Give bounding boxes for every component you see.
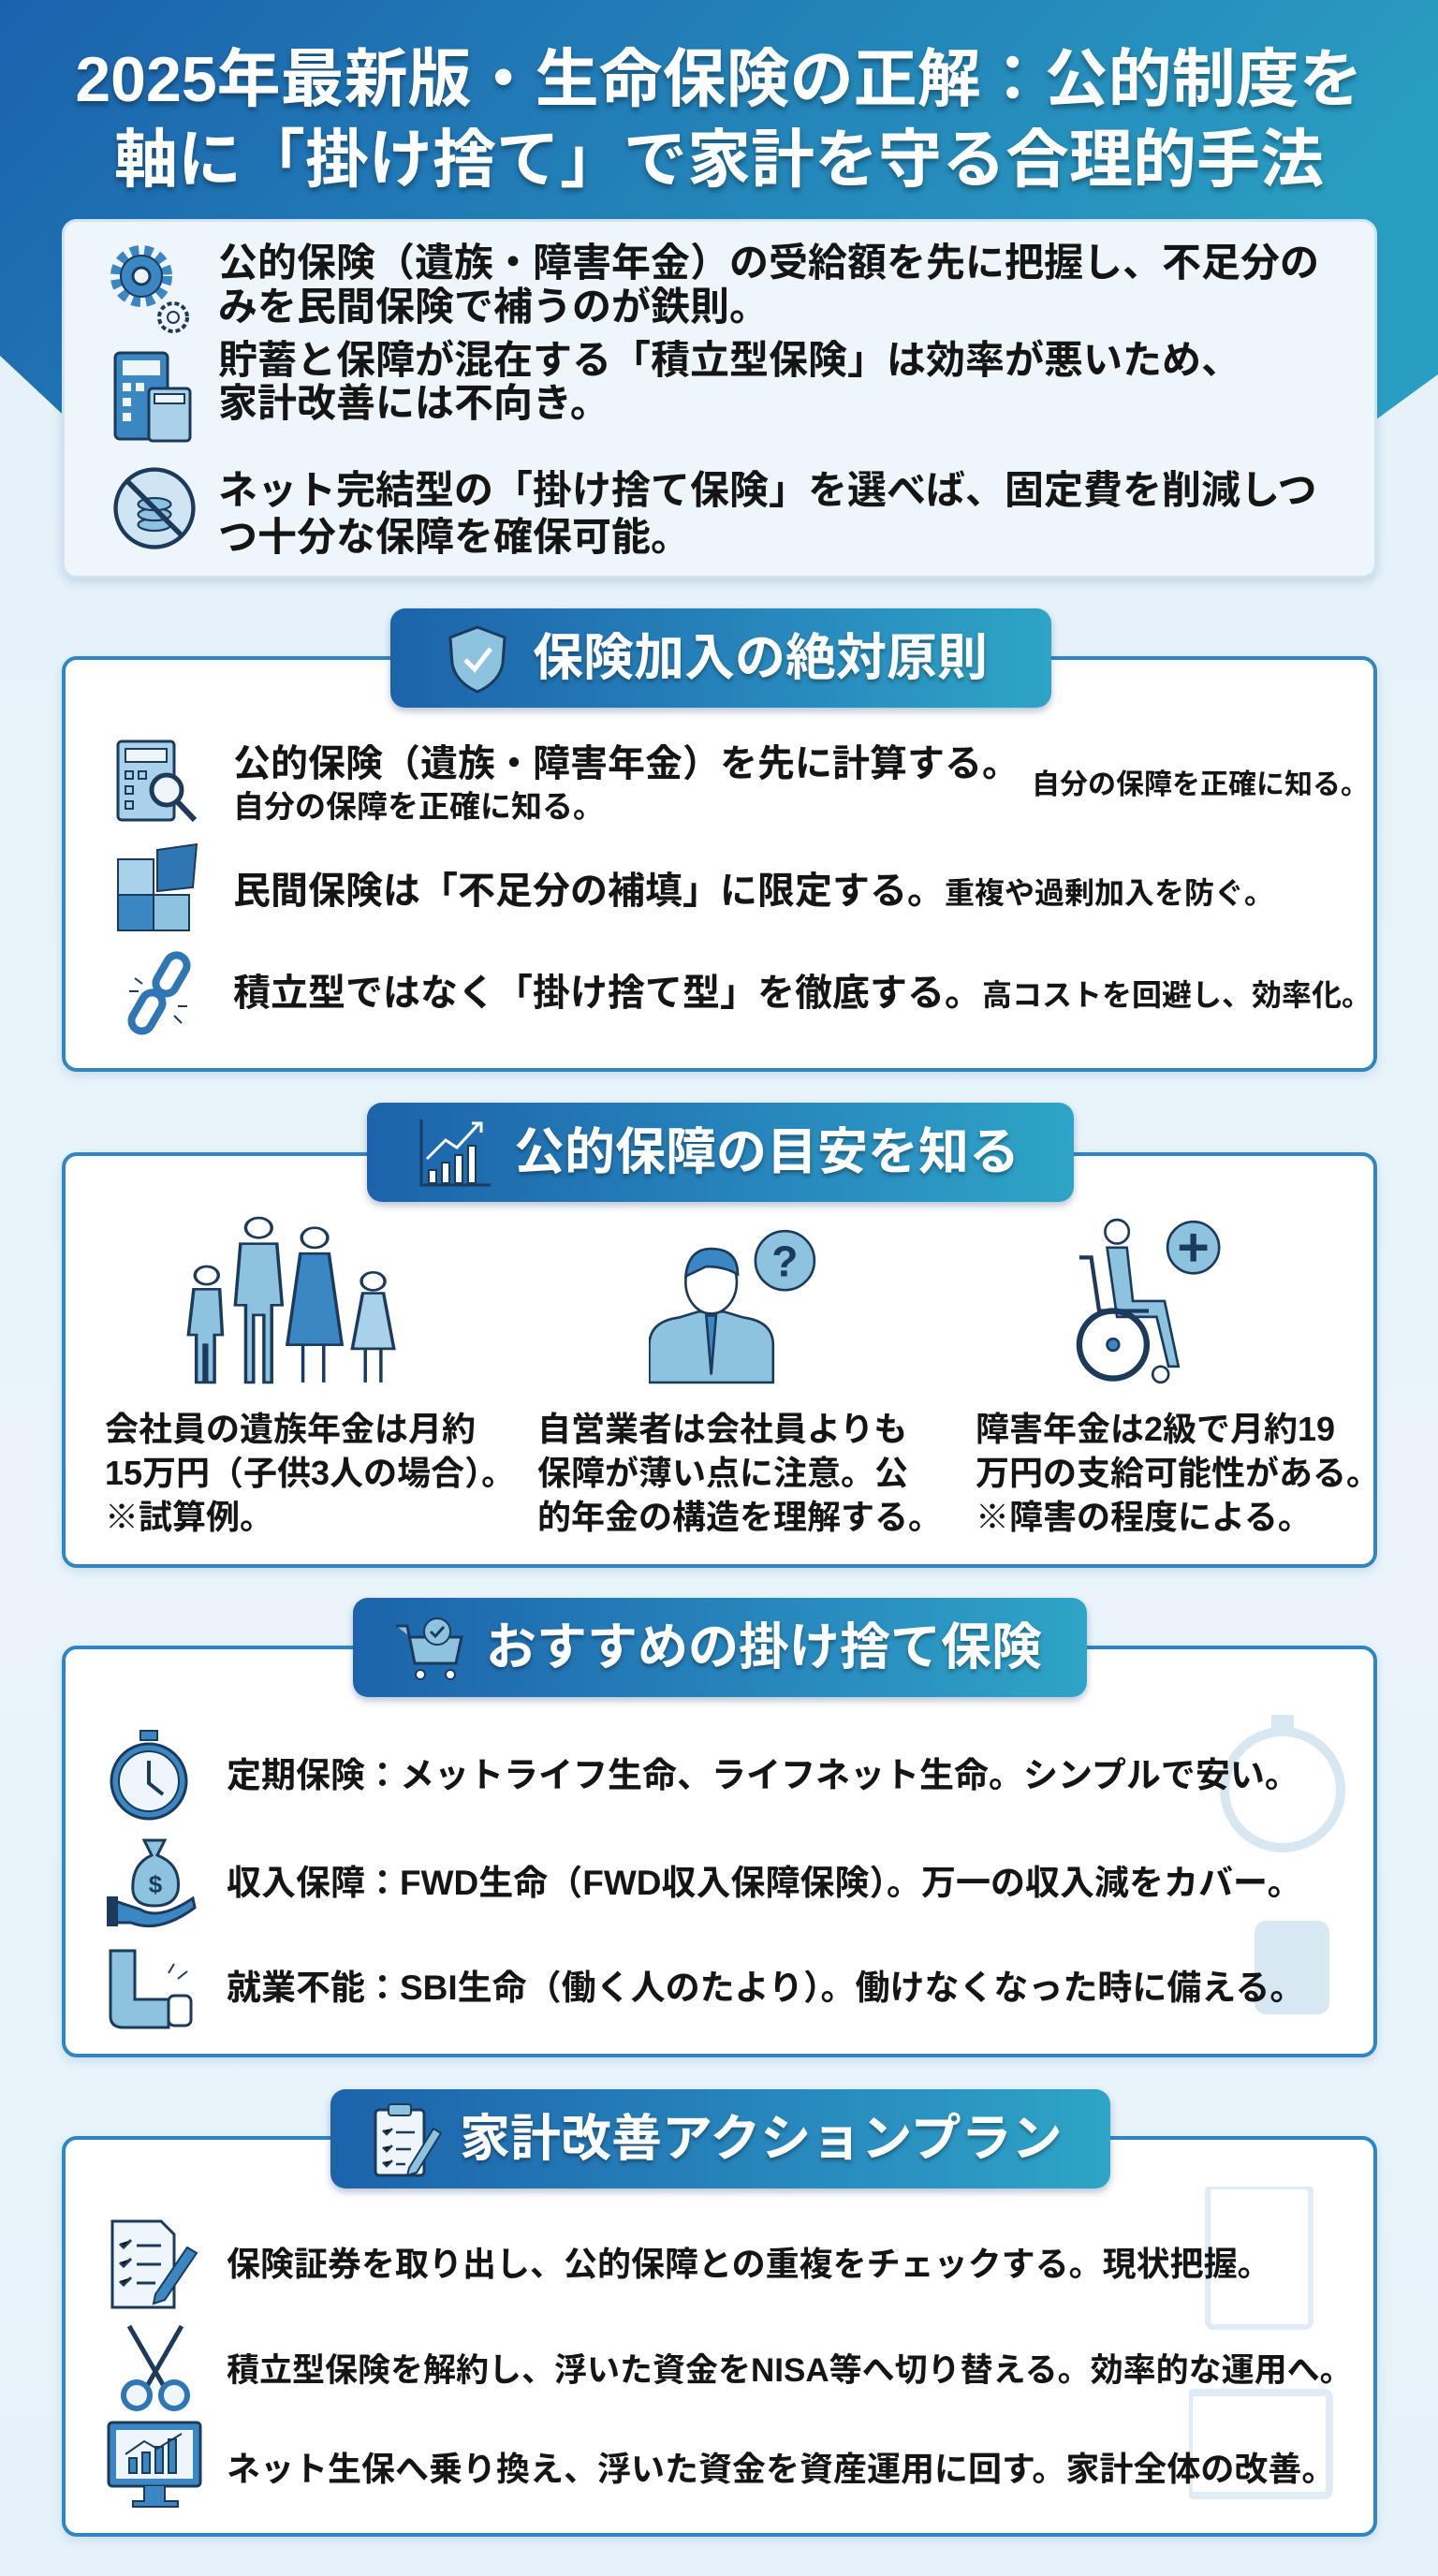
- title: 2025年最新版・生命保険の正解：公的制度を: [75, 44, 1363, 115]
- icon: no coins: [113, 467, 196, 549]
- header: principles: 保険加入の絶対原則: [533, 630, 988, 686]
- item: public calc: [116, 739, 1369, 824]
- icon: checklist: [110, 2220, 198, 2308]
- text: item 3: ネット完結型の「掛け捨て保険」を選べば、固定費を削減しつ: [218, 468, 1316, 512]
- item: public calc: 自分の保障を正確に知る。: [233, 789, 604, 824]
- icon: calculator: [114, 352, 191, 442]
- text: 定期保険：メットライフ生命、ライフネット生命。シンプルで安い。: [227, 1756, 1299, 1794]
- icon: money bag hand: $: [149, 1870, 163, 1898]
- text: 自営業者は会社員よりも: [537, 1410, 907, 1448]
- text: item 2: 貯蓄と保障が混在する「積立型保険」は効率が悪いため、: [218, 338, 1240, 382]
- icon: monitor chart: [107, 2421, 204, 2510]
- icon: chart: [419, 1120, 491, 1187]
- column: self-employed: [537, 1230, 942, 1536]
- item: term life: [110, 1730, 1299, 1820]
- icon: money bag hand: [107, 1838, 197, 1928]
- icon: person question: ?: [771, 1237, 799, 1285]
- text: 収入保障：FWD生命（FWD収入保障保険）。万一の収入減をカバー。: [227, 1864, 1302, 1902]
- item: income: [107, 1838, 1302, 1928]
- text: ※試算例。: [105, 1498, 273, 1536]
- icon: stopwatch: [110, 1730, 187, 1820]
- column: family: [105, 1217, 515, 1536]
- text: item 2: [218, 338, 1240, 425]
- item: switch online: [103, 2421, 1357, 2514]
- text: item 3: つ十分な保障を確保可能。: [218, 515, 690, 559]
- text: item 1: 公的保険（遺族・障害年金）の受給額を先に把握し、不足分の: [218, 241, 1319, 285]
- icon: cart: [396, 1617, 463, 1680]
- text: 保障が薄い点に注意。公: [537, 1454, 908, 1492]
- icon: puzzle: [117, 842, 198, 931]
- panel: summary: [62, 219, 1377, 578]
- title: 軸に「掛け捨て」で家計を守る合理的手法: [114, 124, 1324, 196]
- header: recommended: [353, 1598, 1087, 1697]
- text: [976, 1410, 1380, 1536]
- column: disability: [976, 1219, 1380, 1536]
- text: 保険証券を取り出し、公的保障との重複をチェックする。現状把握。: [227, 2245, 1271, 2283]
- text: item 1: [218, 241, 1319, 329]
- text: 公的保険（遺族・障害年金）を先に計算する。: [233, 743, 1020, 784]
- text: item 1: みを民間保険で補うのが鉄則。: [218, 285, 769, 329]
- header: principles: [390, 608, 1051, 708]
- icon: calculator magnifier: [116, 739, 197, 822]
- panel: principles: [62, 656, 1377, 1072]
- icon: person question: [649, 1230, 816, 1383]
- text: 就業不能：SBI生命（働く人のたより）。働けなくなった時に備える。: [227, 1969, 1304, 2007]
- decorative faded icons: [1189, 2187, 1333, 2499]
- icon: broken chain: [127, 951, 191, 1035]
- text: [537, 1410, 942, 1536]
- icon: family: [186, 1217, 396, 1383]
- item: check policy: [110, 2220, 1271, 2308]
- header: recommended: おすすめの掛け捨て保険: [486, 1619, 1042, 1676]
- text: 15万円（子供3人の場合）。: [105, 1454, 515, 1492]
- header: action plan: 家計改善アクションプラン: [460, 2111, 1063, 2167]
- header: public guidelines: [367, 1103, 1074, 1202]
- header: public guidelines: 公的保障の目安を知る: [514, 1124, 1020, 1180]
- text: item 2: 家計改善には不向き。: [218, 381, 609, 425]
- text: 会社員の遺族年金は月約: [105, 1410, 476, 1448]
- icon: gears: [110, 245, 189, 333]
- text: 的年金の構造を理解する。: [537, 1498, 942, 1536]
- panel: action plan: [62, 2136, 1377, 2537]
- text: 万円の支給可能性がある。: [976, 1454, 1380, 1492]
- panel: recommended: [62, 1646, 1377, 2057]
- text: item 3: [218, 468, 1316, 559]
- panel: public guidelines: [62, 1152, 1377, 1568]
- text: 積立型保険を解約し、浮いた資金をNISA等へ切り替える。効率的な運用へ。: [227, 2352, 1353, 2389]
- text: 民間保険は「不足分の補填」に限定する。重複や過剰加入を防ぐ。: [233, 871, 1274, 912]
- text: ネット生保へ乗り換え、浮いた資金を資産運用に回す。家計全体の改善。: [227, 2450, 1335, 2488]
- decorative faded icons: [1220, 1715, 1345, 2014]
- title: [75, 44, 1363, 196]
- icon: bandaged arm: [109, 1949, 193, 2029]
- header background: [0, 0, 1438, 419]
- icon: wheelchair: [1077, 1219, 1221, 1383]
- item: private: [117, 842, 1274, 931]
- text: 障害年金は2級で月約19: [976, 1410, 1335, 1448]
- item: disability: [109, 1949, 1304, 2029]
- text: ※障害の程度による。: [976, 1498, 1312, 1536]
- icon: clipboard: [372, 2102, 443, 2177]
- header: action plan: [330, 2089, 1110, 2188]
- item: public calc: 自分の保障を正確に知る。: [1032, 769, 1369, 800]
- icon: scissors: [121, 2325, 190, 2411]
- text: 積立型ではなく「掛け捨て型」を徹底する。高コストを回避し、効率化。: [233, 973, 1372, 1014]
- icon: shield: [448, 625, 506, 693]
- item: cancel savings: [121, 2325, 1353, 2411]
- text: [105, 1410, 515, 1536]
- item: term: [127, 951, 1372, 1035]
